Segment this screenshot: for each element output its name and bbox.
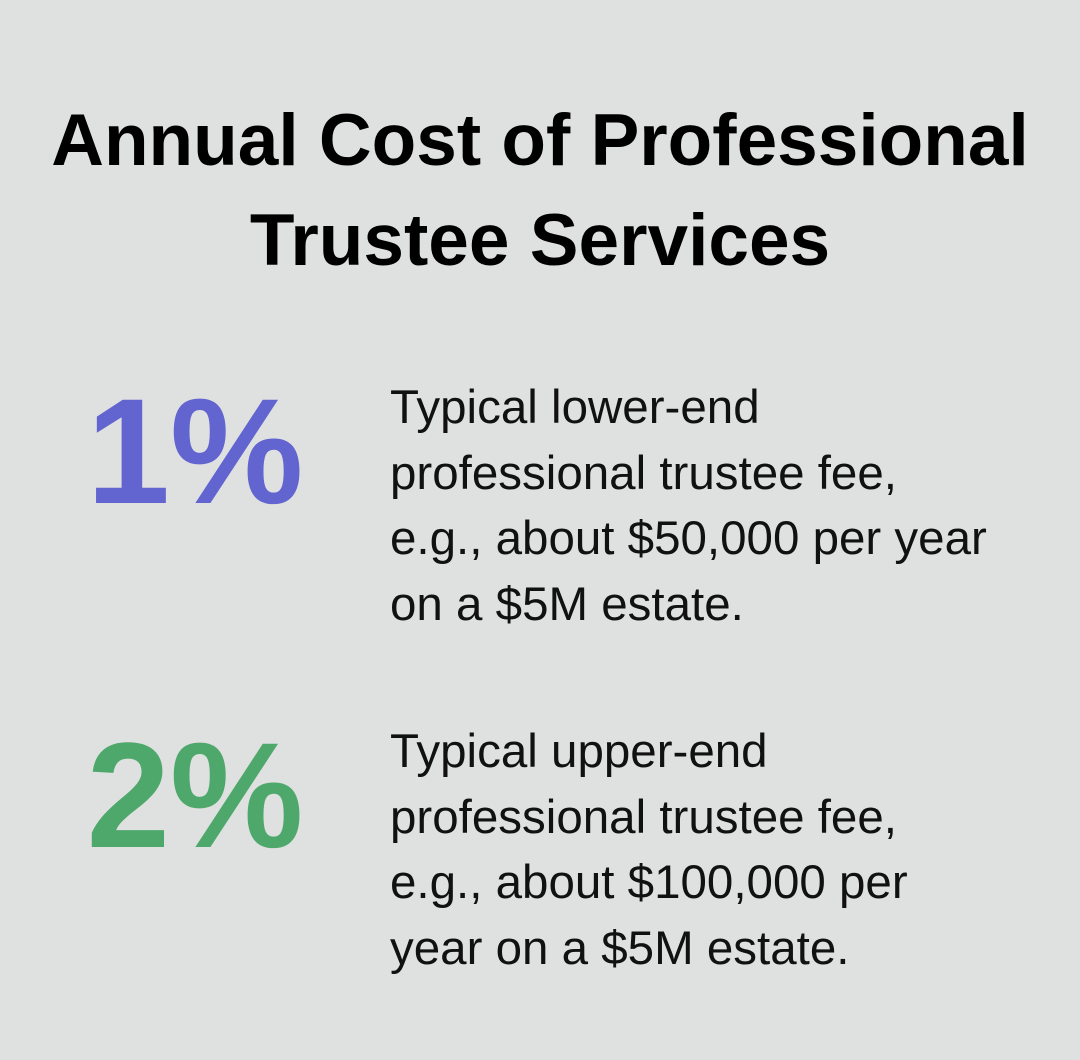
text: upper-end fee: professional trustee fee,: [390, 790, 897, 844]
text: lower-end fee: Typical lower-end: [390, 381, 760, 434]
stat: 1%: 1%: [87, 367, 303, 535]
text: lower-end fee: professional trustee fee,: [390, 446, 897, 500]
stat: 2%: 2%: [87, 711, 303, 879]
text: upper-end fee: e.g., about $100,000 per: [390, 856, 908, 909]
text: upper-end fee: Typical upper-end: [390, 725, 768, 778]
text: upper-end fee: [390, 725, 908, 974]
title: Trustee Services: [250, 200, 830, 281]
text: upper-end fee: year on a $5M estate.: [390, 922, 849, 974]
title: [51, 100, 1029, 281]
text: lower-end fee: e.g., about $50,000 per year: [390, 512, 987, 565]
title: Annual Cost of Professional: [51, 100, 1029, 181]
text: lower-end fee: on a $5M estate.: [390, 578, 744, 630]
text: lower-end fee: [390, 381, 987, 630]
